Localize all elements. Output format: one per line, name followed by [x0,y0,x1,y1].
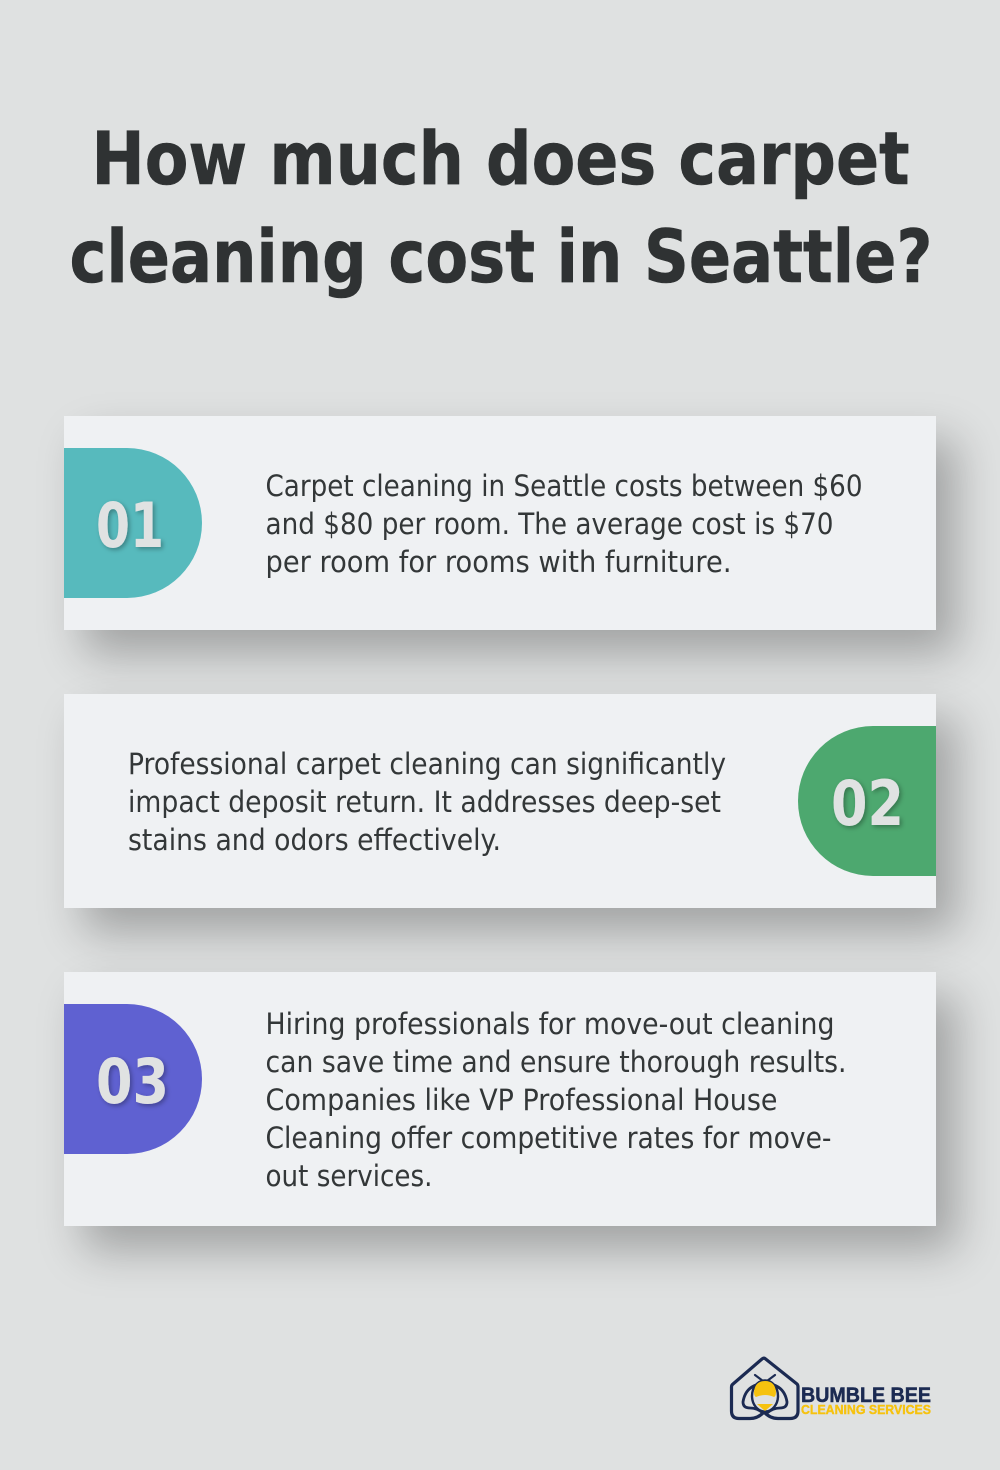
icon: house with bee [732,1358,798,1418]
text: step 03: Cleaning offer competitive rates for move- [266,1121,832,1155]
number 02: 02 [831,767,904,840]
logo wordmark: BUMBLE BEE [801,1383,931,1407]
text: step 02: stains and odors effectively. [128,823,501,857]
text: step 03: Hiring professionals for move-out cleaning [266,1007,834,1041]
text: step 03 [266,1007,846,1193]
title [70,117,932,300]
card 3 background [64,972,936,1226]
card 2 background [64,694,936,908]
logo tagline: CLEANING SERVICES [801,1402,931,1417]
number 01: 01 [96,489,164,562]
panel: step 02 [128,726,936,876]
badge 03 [64,1004,202,1154]
badge 02 [798,726,936,876]
text: step 01: per room for rooms with furniture. [266,545,732,579]
panel: step 01 [64,448,862,598]
logo: Bumble Bee Cleaning Services [732,1358,931,1418]
card 1 background [64,416,936,630]
text: step 03: can save time and ensure thorough results. [266,1045,846,1079]
text: step 02: impact deposit return. It addresses deep-set [128,785,721,819]
text: step 02 [128,747,726,857]
text: step 03: Companies like VP Professional House [266,1083,778,1117]
text: step 01: and $80 per room. The average cost is $70 [266,507,834,541]
badge 01 [64,448,202,598]
text: step 01 [266,469,862,579]
text: step 01: Carpet cleaning in Seattle costs between $60 [266,469,862,503]
text: step 02: Professional carpet cleaning can significantly [128,747,726,781]
panel: step 03 [64,1004,846,1193]
text: step 03: out services. [266,1159,432,1193]
number 03: 03 [96,1045,169,1118]
